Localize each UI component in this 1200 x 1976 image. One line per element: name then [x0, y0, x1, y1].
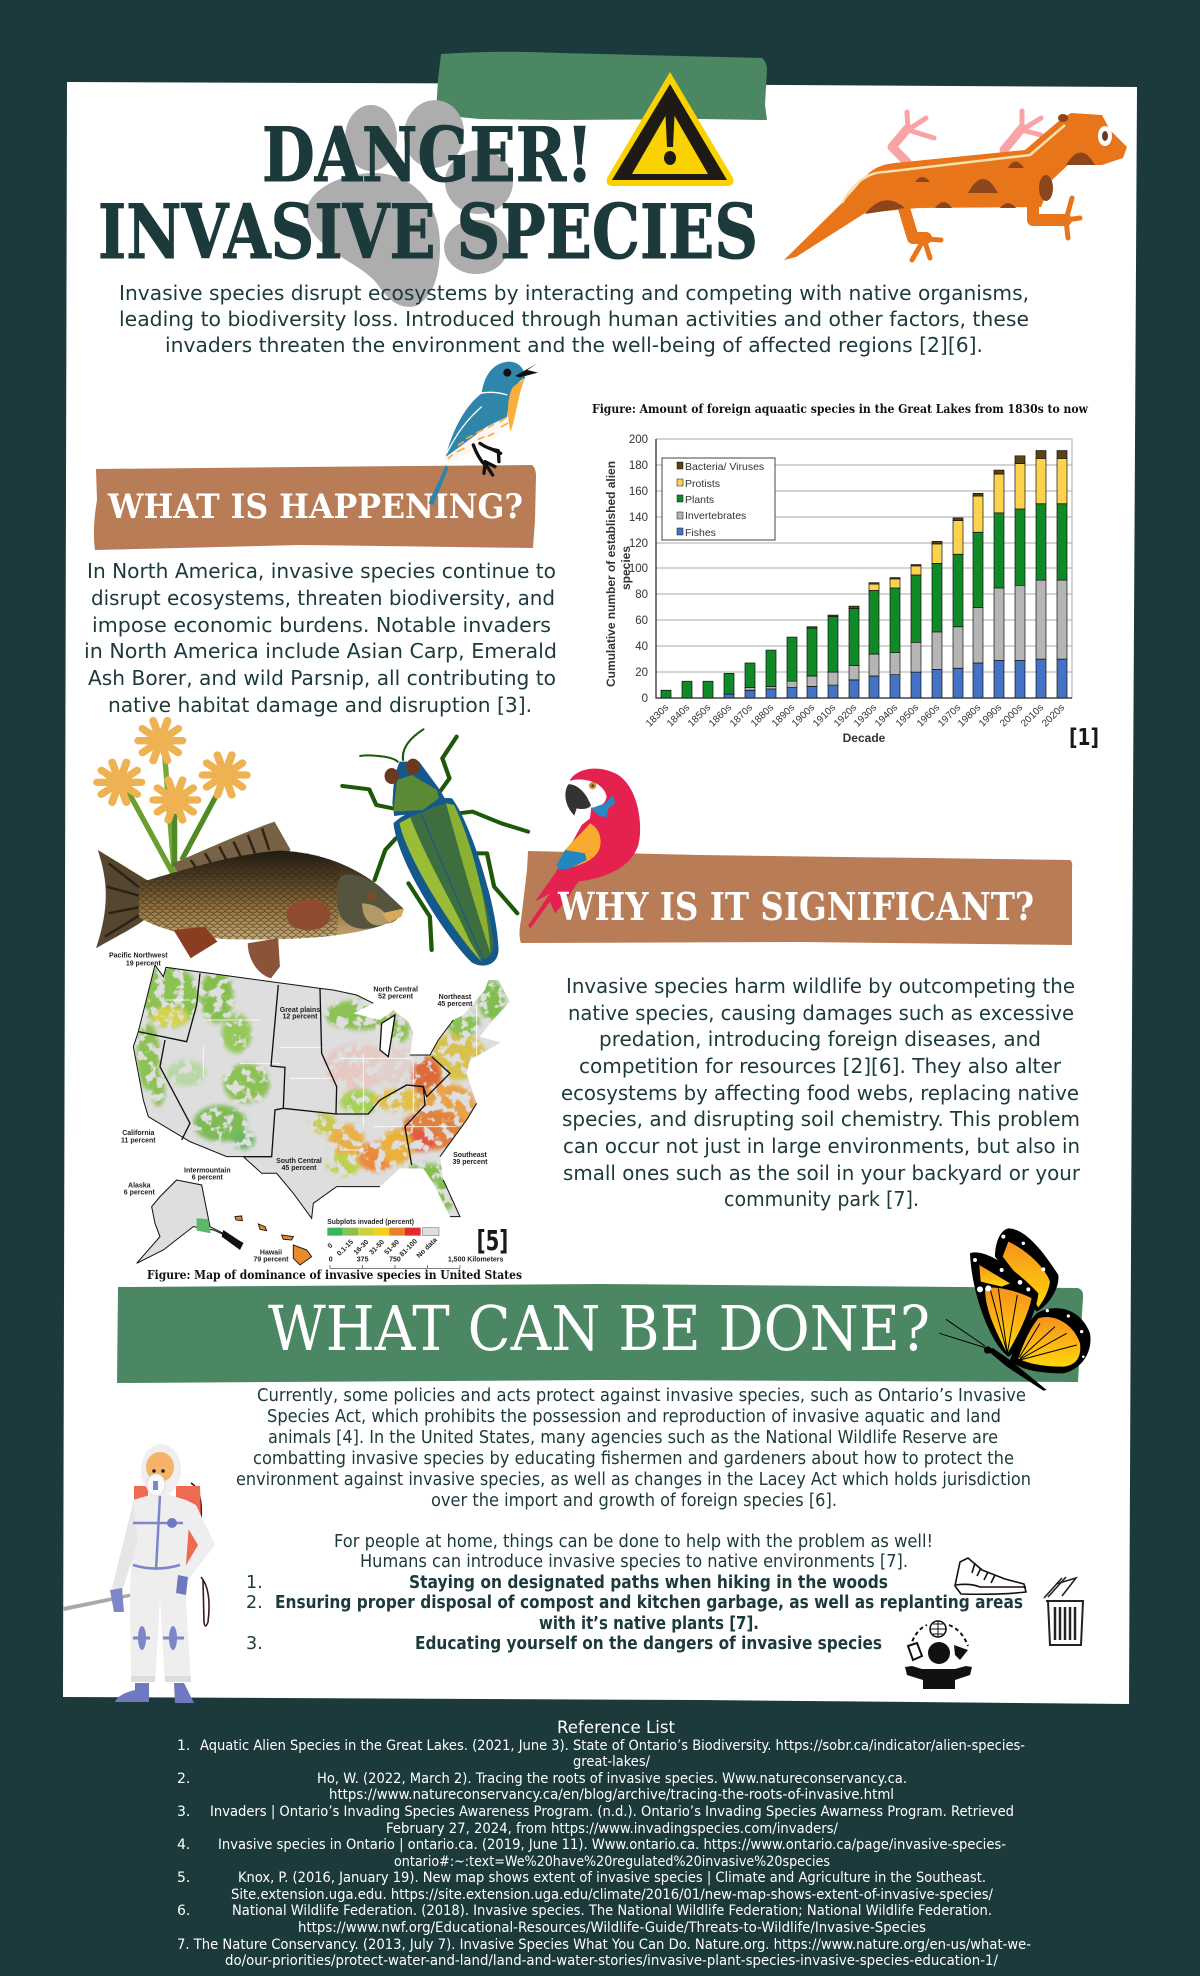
reference list: Knox, P. (2016, January 19). New map shows extent of invasive species | Climate and Agriculture in the Southeast. [238, 1870, 986, 1886]
map: dominance of invasive species in United States: [5] [477, 1226, 508, 1257]
stacked bar chart: foreign aquatic species: 20 [635, 667, 648, 679]
stacked bar chart: foreign aquatic species: Fishes [685, 527, 716, 539]
stacked bar chart: foreign aquatic species: 160 [629, 486, 648, 498]
icon: orange salamander [784, 111, 1127, 260]
map: dominance of invasive species in United States: Hawaii [260, 1249, 282, 1256]
action list [246, 1573, 1023, 1654]
stacked bar chart: foreign aquatic species: 1920s [832, 702, 859, 729]
reference list: 7. The Nature Conservancy. (2013, July 7). Invasive Species What You Can Do. Nature.org. https://www.nature.org/en-us/what-we- [177, 1937, 1031, 1953]
stacked bar chart: foreign aquatic species: 40 [635, 641, 648, 653]
stacked bar chart: foreign aquatic species: Invertebrates [685, 510, 746, 522]
icon: carp fish [96, 822, 404, 978]
why is it significant text: native species, causing damages such as excessive [568, 1001, 1074, 1025]
action list: with it’s native plants [7]. [539, 1614, 759, 1634]
reference list: Site.extension.uga.edu. https://site.extension.uga.edu/climate/2016/01/new-map-shows-extent-of-invasive-species/ [231, 1887, 993, 1903]
reference list: Reference List [557, 1718, 675, 1738]
stacked bar chart: foreign aquatic species: species [619, 546, 633, 590]
stacked bar chart: foreign aquatic species: 1930s [852, 702, 879, 729]
stacked bar chart: foreign aquatic species: 1960s [915, 702, 942, 729]
what is happening text: In North America, invasive species continue to [87, 559, 556, 583]
what can be done text: Currently, some policies and acts protect against invasive species, such as Ontario’s Invasive [257, 1386, 1026, 1406]
stacked bar chart: foreign aquatic species: 1980s [956, 702, 983, 729]
map: dominance of invasive species in United States: 0.1-15 [336, 1239, 355, 1258]
green tape banner [436, 52, 767, 120]
map: dominance of invasive species in United States: 375 [357, 1257, 369, 1264]
action list: Staying on designated paths when hiking in the woods [409, 1573, 888, 1593]
icon: trash can [1044, 1577, 1084, 1645]
stacked bar chart: foreign aquatic species: 180 [629, 460, 648, 472]
icon: person learning [905, 1621, 972, 1689]
icon: running shoe [955, 1558, 1026, 1594]
reference list: 6. [177, 1903, 190, 1919]
action list: Educating yourself on the dangers of invasive species [415, 1634, 882, 1654]
stacked bar chart: foreign aquatic species: 1840s [665, 702, 692, 729]
map: dominance of invasive species in United States: Intermountain [184, 1167, 231, 1174]
stacked bar chart: foreign aquatic species: 80 [635, 589, 648, 601]
stacked bar chart: foreign aquatic species: 200 [629, 434, 648, 446]
map: dominance of invasive species in United States: Subplots invaded (percent) [327, 1219, 414, 1226]
stacked bar chart: foreign aquatic species: 2000s [998, 702, 1025, 729]
stacked bar chart: foreign aquatic species: Protists [685, 478, 720, 490]
map: dominance of invasive species in United States: 79 percent [254, 1256, 289, 1263]
reference list: 4. [177, 1837, 190, 1853]
map caption: Figure: Map of dominance of invasive species in United States [147, 1267, 522, 1282]
map: dominance of invasive species in United States: 16-30 [353, 1239, 370, 1256]
map: dominance of invasive species in United States: Pacific Northwest [109, 952, 168, 959]
stacked bar chart: foreign aquatic species: 1870s [728, 702, 755, 729]
map: dominance of invasive species in United States: Great plains [280, 1007, 320, 1014]
intro text: invaders threaten the environment and the well-being of affected regions [2][6]. [165, 333, 983, 357]
why is it significant text: competition for resources [2][6]. They also alter [579, 1054, 1062, 1078]
map: dominance of invasive species in United States: South Central [276, 1158, 322, 1165]
why is it significant text: ecosystems by affecting food webs, replacing native [561, 1081, 1079, 1105]
map: dominance of invasive species in United States: 11 percent [121, 1137, 156, 1144]
reference list: https://www.nwf.org/Educational-Resources/Wildlife-Guide/Threats-to-Wildlife/Invasive-Species [298, 1920, 926, 1936]
stacked bar chart: foreign aquatic species: 1910s [811, 702, 838, 729]
intro text: leading to biodiversity loss. Introduced through human activities and other factors, these [119, 307, 1029, 331]
reference list: great-lakes/ [573, 1754, 650, 1770]
stacked bar chart: foreign aquatic species: 2010s [1019, 702, 1046, 729]
stacked bar chart: foreign aquatic species: Decade [843, 731, 886, 745]
map: dominance of invasive species in United States: 51-80 [383, 1239, 401, 1256]
panel: white sheet [63, 82, 1137, 1704]
map: dominance of invasive species in United States: 0 [327, 1242, 335, 1250]
chart caption: Figure: Amount of foreign aquaatic species in the Great Lakes from 1830s to now [592, 401, 1089, 416]
icon: warning triangle [607, 72, 733, 186]
map: dominance of invasive species in United States: Northeast [439, 994, 472, 1001]
why is it significant text: Invasive species harm wildlife by outcompeting the [566, 974, 1075, 998]
reference list: February 27, 2024, from https://www.invadingspecies.com/invaders/ [386, 1821, 838, 1837]
icon: yellow parsnip flowers [97, 721, 247, 877]
icon: monarch butterfly [939, 1228, 1090, 1391]
stacked bar chart: foreign aquatic species: 1940s [873, 702, 900, 729]
map: dominance of invasive species in United States: 52 percent [378, 993, 414, 1000]
stacked bar chart: foreign aquatic species [604, 434, 1099, 751]
title: INVASIVE SPECIES [98, 188, 758, 276]
stacked bar chart: foreign aquatic species: 1990s [977, 702, 1004, 729]
title: DANGER! [262, 111, 593, 199]
map: dominance of invasive species in United States: 39 percent [452, 1159, 488, 1166]
stacked bar chart: foreign aquatic species: [1] [1069, 725, 1099, 751]
stacked bar chart: foreign aquatic species: 60 [635, 615, 648, 627]
icon: grey paw print [306, 96, 513, 307]
icon: blue bird [428, 362, 538, 505]
reference list: https://www.natureconservancy.ca/en/blog/archive/tracing-the-roots-of-invasive.html [329, 1787, 894, 1803]
what can be done text [236, 1386, 1031, 1572]
map: dominance of invasive species in United States: Southeast [453, 1152, 488, 1159]
stacked bar chart: foreign aquatic species: 1880s [749, 702, 776, 729]
map: dominance of invasive species in United States: 1,500 Kilometers [448, 1257, 503, 1264]
reference list: 2. [177, 1771, 190, 1787]
stacked bar chart: foreign aquatic species: 1950s [894, 702, 921, 729]
what is happening text: in North America include Asian Carp, Emerald [84, 639, 557, 663]
action list: 1. [246, 1573, 263, 1593]
stacked bar chart: foreign aquatic species: Bacteria/ Viruses [685, 461, 764, 473]
reference list: do/our-priorities/protect-water-and-land/land-and-water-stories/invasive-plant-species-invasive-species-education-1/ [225, 1953, 998, 1969]
map: dominance of invasive species in United States: North Central [373, 987, 418, 994]
what can be done text: combatting invasive species by educating fishermen and gardeners about how to protect the [253, 1449, 1014, 1469]
stacked bar chart: foreign aquatic species: Plants [685, 494, 714, 506]
map: dominance of invasive species in United States: California [122, 1130, 155, 1137]
map: dominance of invasive species in United States: 6 percent [192, 1174, 224, 1181]
stacked bar chart: foreign aquatic species: 0 [642, 693, 648, 705]
stacked bar chart: foreign aquatic species: 100 [629, 563, 648, 575]
stacked bar chart: foreign aquatic species: 1850s [686, 702, 713, 729]
action list: 2. [246, 1593, 263, 1613]
map: dominance of invasive species in United States [109, 952, 510, 1268]
stacked bar chart: foreign aquatic species: 1900s [790, 702, 817, 729]
why is it significant text [561, 974, 1081, 1211]
map: dominance of invasive species in United States: 750 [389, 1257, 401, 1264]
reference list: ontario#:~:text=We%20have%20regulated%20invasive%20species [394, 1854, 830, 1870]
stacked bar chart: foreign aquatic species: 1860s [707, 702, 734, 729]
what can be done text: For people at home, things can be done to help with the problem as well! [334, 1532, 933, 1552]
what can be done text: Humans can introduce invasive species to native environments [7]. [360, 1552, 908, 1572]
what can be done text: over the import and growth of foreign species [6]. [431, 1491, 837, 1511]
action list: 3. [246, 1634, 263, 1654]
section banner: what can be done [117, 1284, 1083, 1383]
reference list: Invaders | Ontario’s Invading Species Awareness Program. (n.d.). Ontario’s Invading Species Awarness Program. Retrieved [210, 1804, 1014, 1820]
reference list [177, 1718, 1031, 1969]
map: dominance of invasive species in United States: 6 percent [124, 1190, 156, 1197]
map: dominance of invasive species in United States: No data [416, 1237, 439, 1260]
map: dominance of invasive species in United States: 12 percent [283, 1014, 318, 1021]
map: dominance of invasive species in United States: Alaska [128, 1183, 151, 1190]
what is happening text: impose economic burdens. Notable invaders [92, 613, 551, 637]
icon: hazmat worker spraying [63, 1444, 215, 1703]
intro text [119, 281, 1029, 357]
title [98, 111, 758, 276]
reference list: National Wildlife Federation. (2018). Invasive species. The National Wildlife Federation; National Wildlife Federation. [232, 1903, 992, 1919]
stacked bar chart: foreign aquatic species: 1890s [770, 702, 797, 729]
reference list: 1. [177, 1738, 190, 1754]
stacked bar chart: foreign aquatic species: 120 [629, 538, 648, 550]
what can be done text: Species Act, which prohibits the possession and reproduction of invasive aquatic and land [267, 1407, 1001, 1427]
map: dominance of invasive species in United States: 45 percent [282, 1165, 317, 1172]
section banner: why is it significant [520, 851, 1072, 945]
why is it significant text: predation, introducing foreign diseases, and [599, 1027, 1041, 1051]
map: dominance of invasive species in United States: 31-50 [368, 1239, 386, 1256]
map: dominance of invasive species in United States: 45 percent [437, 1001, 473, 1008]
what can be done text: environment against invasive species, as well as changes in the Lacey Act which holds jurisdiction [236, 1470, 1031, 1490]
action list: Ensuring proper disposal of compost and kitchen garbage, as well as replanting areas [275, 1593, 1023, 1613]
section banner: what can be done: WHAT CAN BE DONE? [268, 1292, 930, 1365]
section banner: what is happening: WHAT IS HAPPENING? [107, 487, 523, 527]
map: dominance of invasive species in United States: 0 [329, 1257, 333, 1264]
stacked bar chart: foreign aquatic species: 140 [629, 512, 648, 524]
heading: why is it significant: WHY IS IT SIGNIFICANT? [557, 884, 1034, 929]
stacked bar chart: foreign aquatic species: Cumulative number of established alien [604, 461, 618, 687]
why is it significant text: can occur not just in large environments, but also in [563, 1134, 1080, 1158]
why is it significant text: species, and disrupting soil chemistry. This problem [562, 1107, 1080, 1131]
what is happening text [84, 559, 557, 717]
section banner: what is happening [94, 465, 536, 550]
stacked bar chart: foreign aquatic species: 1830s [644, 702, 671, 729]
map: dominance of invasive species in United States: 19 percent [126, 960, 161, 967]
icon: scarlet macaw parrot [528, 769, 640, 929]
reference list: Ho, W. (2022, March 2). Tracing the roots of invasive species. Www.natureconservancy.ca. [317, 1771, 907, 1787]
what is happening text: disrupt ecosystems, threaten biodiversity, and [91, 586, 555, 610]
map: dominance of invasive species in United States: 81-100 [399, 1238, 419, 1258]
reference list: 3. [177, 1804, 190, 1820]
intro text: Invasive species disrupt ecosystems by interacting and competing with native organisms, [119, 281, 1029, 305]
what is happening text: Ash Borer, and wild Parsnip, all contributing to [88, 666, 556, 690]
stacked bar chart: foreign aquatic species: 1970s [936, 702, 963, 729]
why is it significant text: small ones such as the soil in your backyard or your [563, 1161, 1081, 1185]
reference list: 5. [177, 1870, 190, 1886]
what is happening text: native habitat damage and disruption [3]. [108, 693, 532, 717]
reference list: Aquatic Alien Species in the Great Lakes. (2021, June 3). State of Ontario’s Biodiversity. https://sobr.ca/indicator/alien-species- [200, 1738, 1025, 1754]
why is it significant text: community park [7]. [724, 1187, 919, 1211]
reference list: Invasive species in Ontario | ontario.ca. (2019, June 11). Www.ontario.ca. https://www.ontario.ca/page/invasive-species- [218, 1837, 1006, 1853]
icon: emerald ash borer beetle [342, 729, 528, 966]
stacked bar chart: foreign aquatic species: 2020s [1040, 702, 1067, 729]
what can be done text: animals [4]. In the United States, many agencies such as the National Wildlife Reserve are [268, 1428, 998, 1448]
